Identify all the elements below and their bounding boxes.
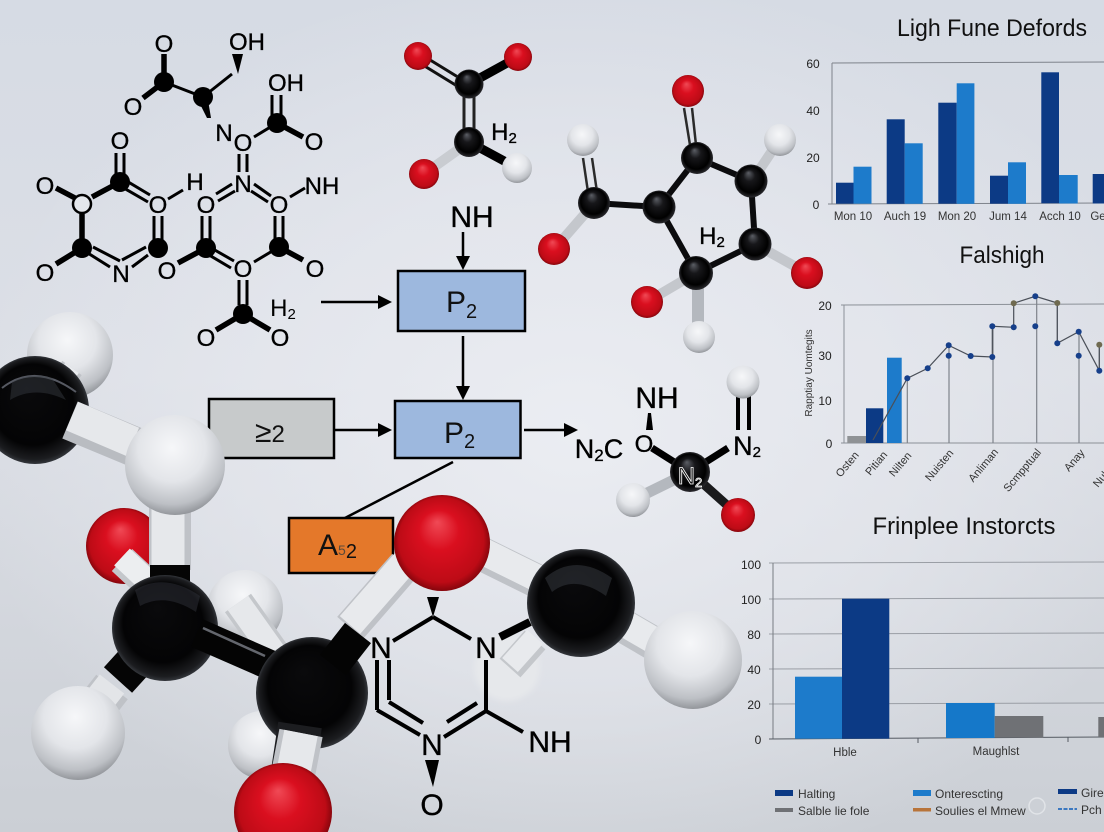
structural formula: top left ring system: O	[149, 192, 167, 219]
structural formula: top left ring system: NH	[305, 173, 339, 200]
x axis labels: Anay	[1062, 447, 1088, 474]
structural formula: top left ring system: N	[234, 171, 252, 198]
y axis labels: 40	[806, 104, 820, 118]
ball and stick molecule: N2 centre	[575, 366, 761, 532]
structural formula: top left ring system: H	[270, 295, 288, 322]
box: orange A52: 5	[338, 542, 346, 558]
x axis labels	[834, 447, 1104, 494]
box: orange A52: A	[318, 529, 338, 562]
structural formula: top left ring system: O	[197, 192, 215, 219]
bars	[847, 358, 902, 443]
data points	[904, 293, 1102, 381]
structural formula: top left ring system: O	[36, 260, 54, 287]
chart: Falshigh line and bars	[804, 242, 1104, 494]
flow diagram	[209, 201, 578, 573]
structural formula: top left ring system	[36, 29, 339, 352]
arrow: formula to first P2	[321, 295, 392, 309]
x axis labels: Maughlst	[973, 746, 1020, 758]
legend: Pch	[1081, 803, 1102, 817]
ball and stick molecule: five-membered ring: 2	[716, 234, 725, 251]
structural formula: top left ring system: OH	[268, 70, 304, 97]
grid lines and axes	[769, 562, 1104, 743]
x axis labels: Nuisten	[923, 448, 956, 484]
x axis labels: Hble	[833, 747, 857, 759]
bars	[795, 599, 1104, 739]
y axis labels	[741, 558, 762, 747]
x axis labels: Jum 14	[989, 211, 1027, 223]
bars	[836, 72, 1104, 204]
y axis labels: 30	[818, 349, 832, 363]
x axis labels	[833, 746, 1020, 759]
legend: Halting	[798, 787, 835, 801]
ball and stick molecule: N2 centre: 2	[753, 444, 761, 461]
ball and stick molecule: N2 centre: 2	[594, 446, 604, 465]
legend: Soulies el Mmew	[935, 804, 1026, 818]
tube bonds	[50, 368, 665, 728]
ball and stick molecule: top centre	[404, 42, 532, 189]
back spheres	[27, 312, 540, 779]
y axis labels: 100	[741, 593, 761, 607]
x axis labels: Osten	[834, 450, 862, 480]
box: grey input: ≥2	[255, 416, 285, 449]
structural formula: triazine ring	[370, 597, 572, 822]
y axis labels: 100	[741, 558, 761, 572]
structural formula: top left ring system: O	[234, 130, 252, 157]
x axis labels: Auch 19	[884, 211, 926, 223]
chart title: Falshigh	[960, 242, 1044, 269]
box: grey input	[209, 399, 334, 458]
box: first P2	[398, 271, 525, 331]
structural formula: top left ring system: O	[36, 173, 54, 200]
spheres	[0, 356, 742, 832]
ball and stick molecule: five-membered ring: H	[699, 223, 716, 250]
box: orange A52	[289, 518, 393, 573]
label: NH input: NH	[450, 201, 494, 234]
legend	[775, 786, 1104, 818]
arrow: first P2 to second P2	[456, 336, 470, 400]
x axis labels: Anliman	[966, 447, 1001, 485]
x axis labels: Scmpptual	[1001, 447, 1044, 494]
structural formula: top left ring system: O	[111, 128, 129, 155]
structural formula: triazine ring: NH	[528, 726, 572, 759]
structural formula: triazine ring: N	[370, 632, 392, 665]
box: second P2: 2	[464, 431, 475, 453]
structural formula: top left ring system: OH	[229, 29, 265, 56]
y axis labels: 80	[747, 628, 761, 642]
chart: Ligh Fune Defords grouped bars	[806, 15, 1104, 223]
structural formula: top left ring system: N	[112, 261, 130, 288]
structural formula: top left ring system: O	[155, 31, 173, 58]
structural formula: top left ring system: O	[271, 325, 289, 352]
y axis labels: 0	[755, 733, 762, 747]
arrow: second P2 to N2C	[524, 423, 578, 437]
y axis title: Rapptiay Uomtegits	[804, 329, 815, 417]
line series	[873, 296, 1099, 440]
axes	[828, 62, 1104, 204]
y axis labels: 60	[806, 57, 820, 71]
y axis labels: 20	[806, 151, 820, 165]
large ball and stick molecule: foreground	[0, 312, 742, 832]
chart title: Ligh Fune Defords	[897, 15, 1087, 42]
y axis labels: 10	[818, 394, 832, 408]
drop lines	[907, 296, 1099, 443]
box: orange A52: 2	[346, 541, 357, 563]
y axis labels: 0	[826, 437, 833, 451]
arrow: NH to first P2	[456, 232, 470, 270]
y axis labels	[806, 57, 820, 212]
structural formula: triazine ring: O	[420, 789, 444, 822]
chart: Frinplee Instorcts bars	[741, 513, 1104, 818]
axes	[841, 304, 1104, 443]
ball and stick molecule: N2 centre: 2	[695, 475, 702, 490]
y axis labels: 20	[818, 299, 832, 313]
y axis labels: 20	[747, 698, 761, 712]
y axis labels	[818, 299, 833, 451]
y axis labels: 40	[747, 663, 761, 677]
structural formula: top left ring system: O	[158, 258, 176, 285]
chart title: Frinplee Instorcts	[872, 513, 1056, 540]
connector to orange box	[345, 462, 453, 518]
structural formula: top left ring system: O	[306, 256, 324, 283]
structural formula: triazine ring: N	[475, 632, 497, 665]
box: first P2: P	[446, 286, 466, 319]
x axis labels: Mon 20	[938, 211, 976, 223]
ball and stick molecule: top centre: 2	[508, 130, 517, 147]
ball and stick molecule: N2 centre: N	[575, 434, 594, 464]
structural formula: top left ring system: N	[215, 120, 233, 147]
ball and stick molecule: N2 centre: O	[635, 431, 653, 458]
arrow: grey box to second P2	[335, 423, 392, 437]
legend: Salble lie fole	[798, 804, 870, 818]
box: first P2: 2	[466, 301, 477, 323]
legend: Gire	[1081, 786, 1104, 800]
x axis labels: Pitian	[863, 449, 890, 478]
structural formula: top left ring system: H	[186, 169, 204, 196]
structural formula: triazine ring: N	[421, 729, 443, 762]
x axis labels: Nilten	[887, 450, 914, 479]
ball and stick molecule: N2 centre: NH	[635, 382, 679, 415]
ball and stick molecule: N2 centre: C	[604, 434, 623, 464]
structural formula: top left ring system: O	[305, 129, 323, 156]
legend: Onterescting	[935, 787, 1003, 801]
box: second P2	[395, 401, 520, 458]
x axis labels: Mon 10	[834, 211, 872, 223]
x axis labels	[834, 211, 1104, 223]
structural formula: top left ring system: O	[197, 325, 215, 352]
ball and stick molecule: five-membered ring	[538, 75, 823, 353]
structural formula: top left ring system: O	[270, 192, 288, 219]
ball and stick molecule: top centre: H	[491, 119, 508, 146]
structural formula: top left ring system: O	[124, 94, 142, 121]
box: second P2: P	[444, 417, 464, 450]
y axis labels: 0	[813, 198, 820, 212]
ball and stick molecule: N2 centre: N	[733, 431, 753, 461]
x axis labels: Acch 10	[1039, 211, 1081, 223]
structural formula: top left ring system: 2	[288, 306, 296, 323]
ball and stick molecule: N2 centre: N	[678, 463, 695, 490]
watermark	[1029, 798, 1045, 814]
structural formula: top left ring system: O	[234, 256, 252, 283]
